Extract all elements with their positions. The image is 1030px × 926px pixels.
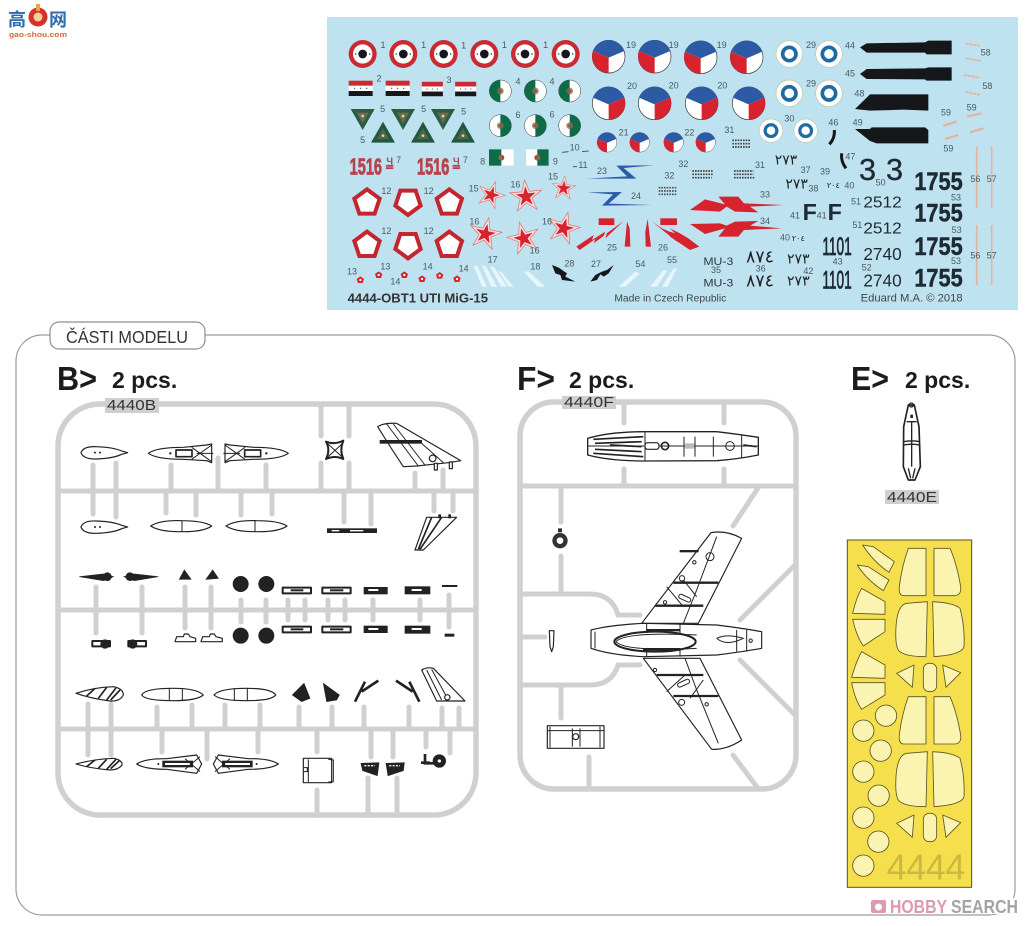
number labels left half: 28 bbox=[564, 258, 574, 268]
tan stencils 56 to 59 bbox=[943, 43, 992, 285]
code numbers 1101: 1101 bbox=[822, 266, 852, 294]
number labels left half: 7 bbox=[396, 155, 401, 165]
number labels left half: 4 bbox=[515, 77, 520, 87]
part: fuselage halves bbox=[148, 444, 288, 463]
number labels left half: 1 bbox=[502, 40, 507, 50]
number labels left half: 21 bbox=[619, 127, 629, 137]
number labels right half: 44 bbox=[845, 41, 855, 51]
code numbers 2512: 2512 bbox=[863, 220, 902, 237]
part: thin bar bbox=[327, 529, 377, 533]
blue lightning 23 and 24 bbox=[587, 165, 654, 206]
number labels right half: 49 bbox=[853, 117, 863, 127]
number labels right half: 57 bbox=[987, 174, 997, 184]
number labels left half: 12 bbox=[424, 226, 434, 236]
logo url: gao-shou.com bbox=[9, 30, 67, 39]
number labels left half: 1 bbox=[421, 40, 426, 50]
heading: sprue E: E> bbox=[851, 360, 889, 397]
pentagon insignia 12 bbox=[354, 189, 462, 258]
part: drop top bbox=[81, 447, 128, 459]
number labels right half: 56 bbox=[970, 174, 980, 184]
black discs row one bbox=[233, 576, 274, 592]
letters F F: F bbox=[803, 199, 817, 225]
number labels left half: 5 bbox=[360, 135, 365, 145]
number labels right half: 59 bbox=[941, 107, 951, 117]
white stripes 17 18 54 55 bbox=[474, 266, 677, 287]
stencil clusters 31 and 32 bbox=[692, 140, 755, 178]
number labels left half: 55 bbox=[667, 255, 677, 265]
watermark text bbox=[890, 897, 1018, 917]
Arabic numerals bbox=[746, 153, 840, 292]
number labels left half: 24 bbox=[631, 191, 641, 201]
letters MU-3: MU-3 bbox=[703, 278, 733, 290]
red numbers 1516: 1516 bbox=[350, 153, 382, 179]
part: tail fin bbox=[378, 423, 461, 470]
heading: sprue B: B> bbox=[57, 360, 97, 397]
number labels right half: 30 bbox=[784, 113, 794, 123]
number labels left half: 11 bbox=[578, 160, 588, 170]
number labels left half: 15 bbox=[469, 183, 479, 193]
made in label: Made in Czech Republic bbox=[614, 294, 726, 305]
Arabic numerals: ٢٠٤ bbox=[792, 234, 805, 243]
part: ring bbox=[552, 528, 568, 548]
number labels left half: 25 bbox=[607, 243, 617, 253]
part: upper fuselage interior bbox=[588, 432, 758, 461]
number labels left half: 1 bbox=[543, 40, 548, 50]
number labels right half: 34 bbox=[760, 216, 770, 226]
part: canopy box bbox=[547, 726, 604, 748]
numerals 3 3: 3 bbox=[859, 153, 876, 187]
heading: sprue E bbox=[851, 360, 970, 397]
number labels right half: 45 bbox=[845, 68, 855, 78]
number labels right half: 59 bbox=[967, 103, 977, 113]
number labels left half: 1 bbox=[380, 40, 385, 50]
number labels right half: 38 bbox=[808, 183, 818, 193]
number labels right half: 20 bbox=[717, 81, 727, 91]
wing: upper bbox=[642, 532, 742, 623]
number labels left half: 20 bbox=[669, 81, 679, 91]
Arabic numerals: ٢٧٣ bbox=[775, 153, 798, 169]
Algerian roundels 4 and 6 bbox=[489, 80, 581, 137]
code numbers 2740 bbox=[863, 244, 902, 291]
number labels right half: 43 bbox=[833, 257, 843, 267]
Arabic numerals: ٢٧٣ bbox=[785, 176, 808, 192]
brackets row two bbox=[283, 626, 454, 636]
number labels right half: 58 bbox=[982, 81, 992, 91]
sprue frame F bbox=[520, 402, 796, 789]
mask windows bbox=[896, 548, 964, 842]
number labels left half: 13 bbox=[347, 267, 357, 277]
number labels right half: 46 bbox=[828, 117, 838, 127]
number labels left half: 54 bbox=[635, 259, 645, 269]
number labels left half: 16 bbox=[530, 246, 540, 256]
number labels left half: 16 bbox=[469, 217, 479, 227]
heading: sprue B bbox=[57, 360, 177, 397]
part: wheel bbox=[421, 754, 446, 767]
number labels right half: 48 bbox=[854, 88, 864, 98]
number labels right half: 58 bbox=[981, 48, 991, 58]
red lightning 33 and 34 bbox=[690, 197, 783, 237]
label 4440E: 4440E bbox=[887, 489, 937, 506]
Czech roundels 19 20 21 22 bbox=[592, 40, 683, 152]
number labels left half: 12 bbox=[424, 186, 434, 196]
number labels right half: 41 bbox=[790, 211, 800, 221]
letters MU-3: MU-3 bbox=[703, 256, 733, 268]
black silhouettes 28 and 27 bbox=[552, 265, 614, 282]
part: struts bbox=[355, 681, 419, 702]
number labels right half: 50 bbox=[876, 177, 886, 187]
watermark text: SEARCH bbox=[951, 897, 1018, 917]
number labels left half: 14 bbox=[423, 262, 433, 272]
part: lens halves bbox=[151, 521, 287, 532]
Algerian flags 8 and 9 bbox=[489, 149, 549, 166]
watermark: Hobby Search bbox=[868, 897, 1020, 917]
part: third tail bbox=[422, 668, 465, 701]
number labels right half: 59 bbox=[943, 143, 953, 153]
number labels left half: 20 bbox=[627, 81, 637, 91]
number labels left half: 16 bbox=[510, 179, 520, 189]
number labels left half: 19 bbox=[669, 40, 679, 50]
number labels left half: 6 bbox=[515, 110, 520, 120]
fuselage bbox=[591, 623, 762, 657]
number labels right half: 51 bbox=[852, 220, 862, 230]
red insignia end of 26 bbox=[670, 228, 699, 250]
parts lower half B bbox=[76, 626, 465, 783]
small stencil marks 10 11 32 bbox=[562, 151, 677, 194]
Czech roundels 19 20 22 bbox=[684, 41, 765, 152]
letters F F: F bbox=[828, 199, 842, 225]
large code numbers 1755: 1755 bbox=[914, 200, 963, 228]
code numbers 1101: 1101 bbox=[822, 233, 852, 261]
panel: yellow canopy mask bbox=[847, 540, 972, 887]
tab title: CASTI MODELU: ČÁSTI MODELU bbox=[66, 326, 188, 347]
red stars 15 and 16 bbox=[467, 175, 583, 255]
number labels right half: 57 bbox=[987, 251, 997, 261]
number labels left half: 19 bbox=[626, 40, 636, 50]
code numbers 2740: 2740 bbox=[863, 271, 902, 291]
code numbers 2512: 2512 bbox=[863, 195, 902, 212]
number labels left half: 27 bbox=[591, 259, 601, 269]
number labels right half: 29 bbox=[806, 78, 816, 88]
part: hourglass bbox=[326, 441, 343, 459]
number labels right half: 32 bbox=[678, 159, 688, 169]
mask number 4444: 4444 bbox=[887, 846, 965, 887]
number labels left half: 6 bbox=[549, 109, 554, 119]
copyright label: Eduard M.A. © 2018 bbox=[861, 293, 963, 305]
red numbers 1516 bbox=[350, 153, 460, 179]
number labels right half: 52 bbox=[862, 262, 872, 272]
numerals 3 3: 3 bbox=[886, 153, 903, 187]
black discs row two bbox=[233, 628, 274, 644]
Arabic numerals: ٢٧٣ bbox=[787, 251, 810, 267]
Arabic numerals: ٢٧٣ bbox=[787, 274, 810, 290]
number labels left half: 10 bbox=[570, 142, 580, 152]
number labels left half: 5 bbox=[461, 107, 466, 117]
Arabic numerals: ٢٠٤ bbox=[827, 181, 840, 190]
letters MU-3 bbox=[703, 256, 733, 290]
label 4440F: 4440F bbox=[564, 394, 614, 411]
number labels left half: 9 bbox=[553, 157, 558, 167]
number labels left half: 5 bbox=[380, 104, 385, 114]
letters F F bbox=[803, 199, 842, 225]
number labels left half bbox=[347, 40, 679, 287]
number labels left half: 15 bbox=[548, 172, 558, 182]
number labels right half: 33 bbox=[760, 189, 770, 199]
red insignia 25 and 26 bbox=[576, 218, 677, 250]
heading: sprue F bbox=[517, 360, 634, 397]
number labels left half: 32 bbox=[664, 171, 674, 181]
decals: right half of sheet bbox=[670, 40, 997, 305]
part: long fuselage halves bbox=[137, 755, 278, 773]
number labels left half: 2 bbox=[376, 73, 381, 83]
number labels left half: 12 bbox=[381, 226, 391, 236]
wing: lower bbox=[643, 658, 742, 749]
large code numbers 1755 bbox=[914, 168, 963, 293]
number labels right half: 53 bbox=[951, 256, 961, 266]
numerals 3 3 bbox=[859, 153, 903, 187]
red numbers 1516: Ч bbox=[453, 156, 460, 167]
heading: sprue F: F> bbox=[517, 360, 555, 397]
number labels right half: 31 bbox=[724, 125, 734, 135]
number labels right half: 42 bbox=[803, 266, 813, 276]
number labels right half: 36 bbox=[756, 263, 766, 273]
number labels right half: 29 bbox=[806, 40, 816, 50]
heading: sprue F: 2 pcs. bbox=[569, 367, 634, 393]
watermark logo: gao-shou.com bbox=[8, 4, 67, 39]
number labels right half: 22 bbox=[684, 127, 694, 137]
label 4440B: 4440B bbox=[107, 397, 156, 414]
sprue F bbox=[520, 394, 796, 789]
number labels left half: 12 bbox=[381, 186, 391, 196]
number labels right half: 47 bbox=[845, 152, 855, 162]
number labels left half: 16 bbox=[542, 217, 552, 227]
airframe assembly bbox=[591, 532, 762, 749]
number labels right half: 40 bbox=[780, 233, 790, 243]
part: drop second bbox=[81, 521, 128, 533]
number labels left half: 14 bbox=[390, 277, 400, 287]
parts upper half B bbox=[79, 423, 461, 594]
number labels left half: 17 bbox=[488, 254, 498, 264]
roundels 1 bbox=[349, 40, 580, 68]
number labels left half: 8 bbox=[480, 157, 485, 167]
sheet title: 4444-OBT1 UTI MiG-15 bbox=[348, 291, 488, 305]
tab title: CASTI MODELU bbox=[50, 322, 205, 349]
number labels right half: 41 bbox=[817, 211, 827, 221]
icon: pink badge bbox=[871, 900, 886, 913]
small red markings 13 and 14 bbox=[357, 271, 461, 283]
number labels left half: 7 bbox=[463, 155, 468, 165]
number labels right half: 53 bbox=[951, 193, 961, 203]
sprue frame B bbox=[58, 404, 476, 815]
code numbers 2512 bbox=[863, 195, 902, 237]
number labels left half: 5 bbox=[421, 104, 426, 114]
small parts row bbox=[79, 570, 218, 581]
number labels right half: 56 bbox=[970, 251, 980, 261]
number labels right half: 53 bbox=[952, 225, 962, 235]
number labels right half: 51 bbox=[851, 197, 861, 207]
logo glyph: wang: 网 bbox=[49, 6, 67, 32]
parts F bbox=[547, 432, 762, 749]
number labels right half: 19 bbox=[717, 40, 727, 50]
decals: left half of sheet bbox=[347, 40, 726, 305]
pitot bar bbox=[680, 550, 698, 552]
number labels left half: 1 bbox=[461, 41, 466, 51]
sprue B bbox=[58, 397, 476, 815]
brackets row one bbox=[283, 585, 457, 594]
black stripes 44 45 48 49 bbox=[855, 41, 952, 143]
heading: sprue B: 2 pcs. bbox=[112, 367, 177, 393]
number labels left half: 13 bbox=[380, 262, 390, 272]
number labels right half bbox=[678, 40, 997, 276]
Arabic numerals: ٨٧٤ bbox=[746, 248, 774, 268]
part: black blobs bbox=[292, 683, 339, 702]
large code numbers 1755: 1755 bbox=[914, 168, 963, 196]
number labels right half: 39 bbox=[820, 167, 830, 177]
blue ring roundels 29 and 30 bbox=[759, 41, 842, 142]
panel: decal sheet bbox=[327, 17, 1018, 310]
mask side shapes bbox=[852, 545, 894, 709]
part: second tail bbox=[415, 515, 457, 550]
part: three-section lenses bbox=[142, 688, 276, 701]
number labels left half: 14 bbox=[459, 263, 469, 273]
large code numbers 1755: 1755 bbox=[914, 265, 963, 293]
number labels right half: 31 bbox=[755, 160, 765, 170]
code numbers 2740: 2740 bbox=[863, 244, 902, 264]
number labels left half: 4 bbox=[549, 77, 554, 87]
part E bbox=[903, 403, 920, 480]
number labels right half: 37 bbox=[801, 165, 811, 175]
red numbers 1516: 1516 bbox=[417, 153, 449, 179]
part: dark brackets bbox=[361, 763, 404, 776]
part: bullet bbox=[549, 631, 554, 652]
large code numbers 1755: 1755 bbox=[914, 233, 963, 261]
mask circles bbox=[853, 705, 897, 876]
Arabic numerals: ٨٧٤ bbox=[746, 272, 774, 292]
logo glyph: gao: 高 bbox=[8, 6, 26, 32]
flags 2 and 3 bbox=[349, 81, 476, 96]
code numbers 1101 bbox=[822, 233, 852, 294]
number labels left half: 23 bbox=[597, 166, 607, 176]
watermark text: HOBBY bbox=[890, 897, 947, 917]
icon: red gear with thumb bbox=[28, 4, 48, 26]
red numbers 1516: Ч bbox=[386, 156, 393, 167]
part: hatched leaf one bbox=[76, 687, 123, 701]
triangular insignia 5 bbox=[351, 109, 475, 143]
part: box bbox=[303, 758, 333, 783]
heading: sprue E: 2 pcs. bbox=[905, 367, 970, 393]
small pieces row two bbox=[92, 634, 222, 648]
number labels left half: 3 bbox=[446, 75, 451, 85]
number labels left half: 26 bbox=[658, 243, 668, 253]
number labels right half: 35 bbox=[711, 265, 721, 275]
black curves 46 and 47 bbox=[829, 130, 846, 168]
number labels right half: 40 bbox=[844, 181, 854, 191]
panel: model parts frame bbox=[16, 322, 1015, 915]
part: hatched leaf two bbox=[76, 758, 122, 770]
number labels left half: 18 bbox=[530, 262, 540, 272]
